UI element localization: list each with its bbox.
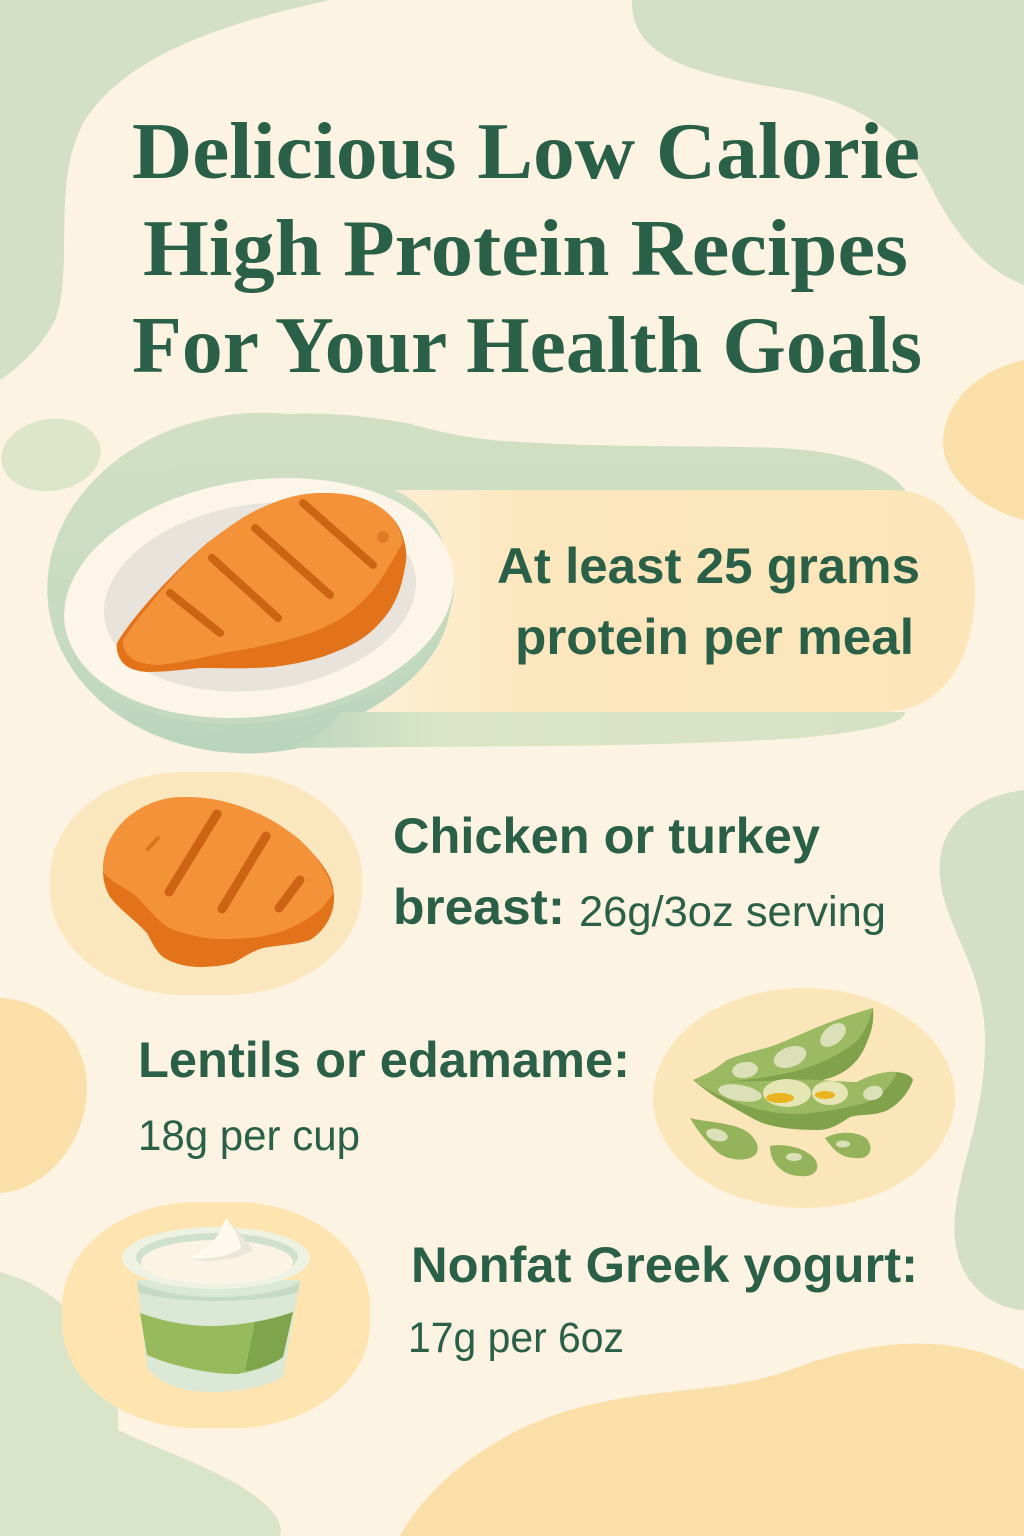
plate shadow xyxy=(92,483,428,711)
icon: yogurt cup xyxy=(122,1218,310,1392)
chicken text: 26g/3oz serving xyxy=(579,888,886,936)
icon: edamame pods xyxy=(690,1008,913,1176)
panel: lentils or edamame xyxy=(138,988,955,1208)
title: Delicious Low Calorie xyxy=(132,108,920,196)
panel: protein per meal xyxy=(33,396,975,770)
lentils text xyxy=(138,1032,630,1160)
icon: grilled chicken breast xyxy=(117,493,406,672)
panel: greek yogurt xyxy=(62,1202,918,1428)
yogurt text xyxy=(408,1237,918,1362)
title: High Protein Recipes xyxy=(143,205,908,293)
green plate swoosh xyxy=(33,396,905,770)
panel: chicken or turkey xyxy=(50,772,886,995)
chicken text: Chicken or turkey xyxy=(393,808,820,864)
chicken text xyxy=(393,808,886,936)
lower band xyxy=(290,712,905,748)
yogurt text: 17g per 6oz xyxy=(408,1314,624,1362)
protein text: protein per meal xyxy=(515,609,914,665)
icon: chicken fillet xyxy=(103,797,334,967)
protein text: At least 25 grams xyxy=(497,538,920,594)
lentils text: 18g per cup xyxy=(138,1112,360,1160)
title xyxy=(132,108,922,390)
icon backdrop xyxy=(653,988,955,1208)
lentils text: Lentils or edamame: xyxy=(138,1032,630,1088)
icon backdrop xyxy=(50,772,362,995)
plate rim shadow xyxy=(50,460,470,748)
title: For Your Health Goals xyxy=(132,302,922,390)
yogurt text: Nonfat Greek yogurt: xyxy=(411,1237,918,1293)
icon backdrop xyxy=(62,1202,370,1428)
plate xyxy=(48,454,470,742)
yellow banner xyxy=(365,490,975,712)
protein text xyxy=(497,538,920,665)
chicken text: breast: xyxy=(393,879,565,935)
